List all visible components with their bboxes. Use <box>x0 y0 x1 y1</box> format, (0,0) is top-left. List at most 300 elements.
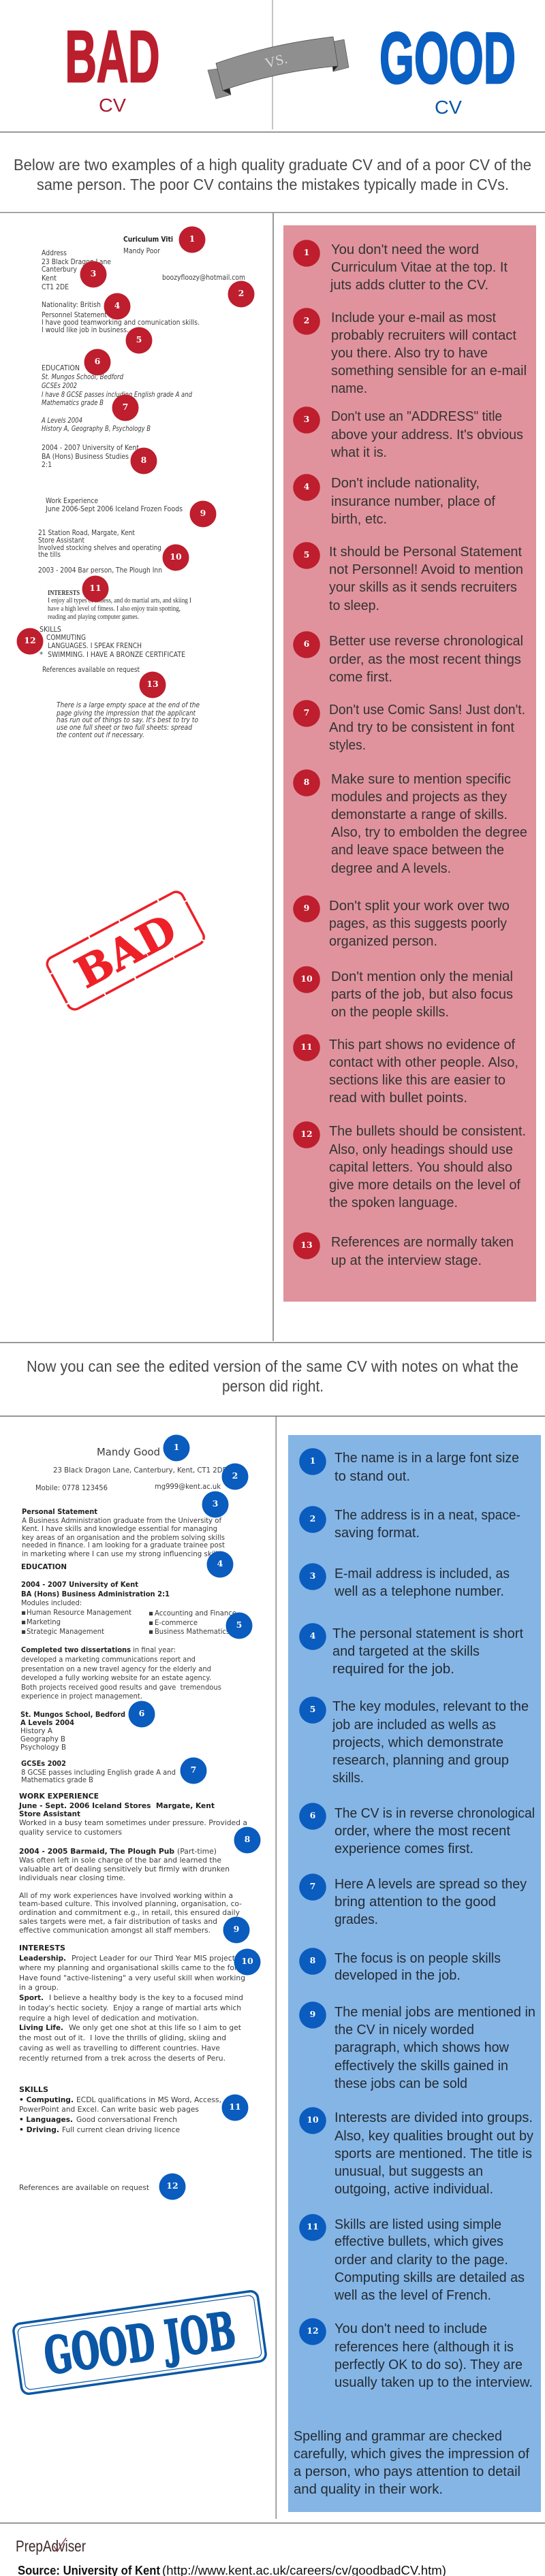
good note 10: 10 <box>307 2114 319 2125</box>
good CV sample: developed a marketing communications report and <box>21 1656 196 1664</box>
intro text <box>14 156 531 193</box>
good note 4: 4 <box>310 1630 316 1641</box>
note 11: sections like this are easier to <box>329 1073 505 1088</box>
note 6: come first. <box>329 670 392 685</box>
good note 10: unusual, but suggests an <box>334 2164 483 2179</box>
good CV sample: quality service to customers <box>19 1829 122 1837</box>
good note 9: The menial jobs are mentioned in <box>334 2005 535 2020</box>
bad CV sample: 2:1 <box>42 461 52 469</box>
bad CV number badges: 6 <box>95 356 101 366</box>
good note 11: well as the level of French. <box>334 2288 491 2303</box>
good CV sample: Human Resource Management <box>27 1609 131 1617</box>
good note 11: 11 <box>307 2221 319 2232</box>
good CV sample: We only get one shot at this life so I aim to get <box>69 2024 241 2032</box>
note 13: References are normally taken <box>331 1235 514 1250</box>
title: GOOD CV: CV <box>435 97 462 118</box>
good CV sample: GCSEs 2002 <box>21 1760 66 1768</box>
bad CV sample: has run out of things to say. It's best to try to <box>57 716 198 724</box>
good CV sample: require a high level of dedication and motivation. <box>19 2014 199 2023</box>
good note 11: effective bullets, which gives <box>334 2234 503 2249</box>
good CV number badges: 5 <box>236 1620 242 1630</box>
note 12: The bullets should be consistent. <box>329 1124 526 1139</box>
good CV sample: sales targets were met, a fair distribution of tasks and <box>19 1918 217 1926</box>
good CV sample: St. Mungos School, Bedford <box>20 1711 125 1719</box>
note 11 <box>293 1034 518 1106</box>
good CV number badges: 1 <box>174 1442 179 1452</box>
note 2: something sensible for an e-mail <box>331 364 527 379</box>
good CV sample: ▪ <box>21 1609 26 1617</box>
bad CV number badges: 7 <box>123 402 128 412</box>
bad CV number badges: 5 <box>136 334 142 344</box>
good CV sample: key areas of an organisation and the problem solving skills <box>22 1534 225 1542</box>
bad CV number badges: 3 <box>91 268 96 278</box>
note 5: It should be Personal Statement <box>329 545 522 560</box>
good note 6: order, where the most recent <box>334 1824 510 1839</box>
good note 6 <box>299 1803 535 1856</box>
bad CV sample: I enjoy all types of fitness, and do martial arts, and skiing I <box>48 597 191 605</box>
bad CV sample: Involved stocking shelves and operating <box>38 544 161 552</box>
good CV sample: • Computing. <box>19 2096 74 2104</box>
good note 10: Also, key qualities brought out by <box>334 2129 533 2144</box>
note 7: 7 <box>304 707 309 718</box>
note 13: 13 <box>300 1240 313 1250</box>
good note 7: 7 <box>310 1881 315 1891</box>
good note 12: references here (although it is <box>334 2340 514 2355</box>
good note 12 <box>299 2318 533 2390</box>
bad CV sample: References available on request <box>42 666 140 674</box>
stamp: GOOD JOB: GOOD JOB <box>41 2302 239 2386</box>
note 9: pages, as this suggests poorly <box>329 916 507 931</box>
good note 1: 1 <box>310 1455 315 1466</box>
note 4: insurance number, place of <box>331 494 495 509</box>
note 6: Better use reverse chronological <box>329 634 523 649</box>
note 12 <box>293 1121 526 1210</box>
good note 9: these jobs can be sold <box>334 2076 467 2091</box>
good note 11 <box>299 2214 525 2303</box>
note 7 <box>293 700 525 753</box>
good CV sample: Strategic Management <box>27 1628 104 1636</box>
note 3: above your address. It's obvious <box>331 428 523 442</box>
good note 5: The key modules, relevant to the <box>332 1699 529 1714</box>
good CV number badges: 3 <box>213 1498 218 1509</box>
good CV sample: caving as well as travelling to different countries. Have <box>19 2044 220 2052</box>
bad CV sample: I would like job in business. <box>42 326 129 334</box>
bad CV sample: I have good teamworking and comunication skills. <box>42 319 200 327</box>
bad CV sample: the content out if necessary. <box>57 731 144 739</box>
bad CV number badges: 9 <box>200 508 206 518</box>
note 5: your skills as it sends recruiters <box>329 580 517 595</box>
good CV sample: INTERESTS <box>19 1944 65 1952</box>
good note 9: 9 <box>310 2009 315 2019</box>
bad CV sample: * <box>40 651 43 659</box>
panel: bad CV notes <box>283 225 536 1302</box>
note 3: Don't use an "ADDRESS" title <box>331 409 502 424</box>
note 2: probably recruiters will contact <box>331 328 516 343</box>
closing note: and quality in their work. <box>294 2482 443 2497</box>
note 10: parts of the job, but also focus <box>331 987 513 1002</box>
note 4: birth, etc. <box>331 512 387 527</box>
good note 9: the CV in nicely worded <box>334 2023 474 2038</box>
good CV sample: Personal Statement <box>22 1508 97 1516</box>
good note 11: Skills are listed using simple <box>334 2217 501 2232</box>
intro text: Below are two examples of a high quality graduate CV and of a poor CV of the <box>14 156 531 174</box>
good CV sample: WORK EXPERIENCE <box>19 1792 99 1801</box>
good note 4 <box>299 1623 523 1677</box>
good CV sample: I believe a healthy body is the key to a focused mind <box>49 1994 243 2002</box>
note 9: organized person. <box>329 934 437 949</box>
bad CV sample <box>38 236 245 739</box>
good CV number badges: 9 <box>234 1924 239 1934</box>
bad CV sample: There is a large empty space at the end of the <box>57 701 200 709</box>
bad CV sample: INTERESTS <box>48 590 80 597</box>
good CV sample: individuals near closing time. <box>19 1874 125 1882</box>
ribbon: VS. <box>208 37 349 99</box>
good CV sample: Good conversational French <box>76 2116 177 2124</box>
note 9: 9 <box>304 903 309 913</box>
title: BAD CV: CV <box>99 95 126 116</box>
good CV sample: Have found "active-listening" a very useful skill when working <box>19 1974 245 1982</box>
good note 12: You don't need to include <box>334 2321 487 2336</box>
bad CV sample: Nationality: British <box>42 301 101 309</box>
good note 8 <box>299 1948 501 1983</box>
good note 10: Interests are divided into groups. <box>334 2110 533 2125</box>
bad CV sample: SKILLS <box>40 626 61 634</box>
good note 5: projects, which demonstrate <box>332 1735 503 1750</box>
good CV number badges: 12 <box>166 2180 178 2191</box>
good note 6: The CV is in reverse chronological <box>334 1806 535 1821</box>
bad CV sample: page giving the impression that the applicant <box>56 709 196 718</box>
stamp: BAD: BAD <box>67 904 185 998</box>
note 11: 11 <box>300 1042 313 1052</box>
good CV sample: Mandy Good <box>97 1446 160 1458</box>
good note 8: 8 <box>310 1955 316 1965</box>
bad CV number badges: 10 <box>170 551 182 562</box>
good note 4: The personal statement is short <box>332 1626 523 1641</box>
good note 4: and targeted at the skills <box>332 1644 480 1659</box>
good note 8: developed in the job. <box>334 1968 461 1983</box>
bad CV sample: 21 Station Road, Margate, Kent <box>38 529 135 537</box>
good CV sample: E-commerce <box>155 1619 198 1627</box>
bad CV sample: CT1 2DE <box>42 283 69 291</box>
good note 8: The focus is on people skills <box>334 1951 501 1966</box>
good note 2 <box>299 1506 520 1541</box>
closing note: Spelling and grammar are checked <box>294 2429 502 2444</box>
bad CV sample: LANGUAGES. I SPEAK FRENCH <box>48 642 142 650</box>
note 7: Don't use Comic Sans! Just don't. <box>329 703 525 718</box>
second intro text <box>27 1357 518 1395</box>
note 10 <box>293 966 513 1020</box>
note 6: 6 <box>304 639 310 649</box>
bad CV sample: have a high level of fitness. I also enjoy train spotting, <box>48 605 181 613</box>
good note 5: skills. <box>332 1771 364 1786</box>
note 6: order, as the most recent things <box>329 652 521 667</box>
note 1: 1 <box>304 247 309 257</box>
good note 7: grades. <box>334 1912 378 1927</box>
good CV number badges: 10 <box>241 1956 253 1966</box>
bad CV sample: SWIMMING. I HAVE A BRONZE CERTIFICATE <box>48 651 185 659</box>
panel: good CV notes <box>288 1435 541 2512</box>
bad CV number badges: 8 <box>141 455 147 465</box>
intro text: same person. The poor CV contains the mistakes typically made in CVs. <box>37 176 509 193</box>
good note 12: perfectly OK to do so). They are <box>334 2357 523 2372</box>
good CV sample: 8 GCSE passes including English grade A and <box>21 1769 176 1777</box>
good CV number badges <box>128 1435 260 2200</box>
good CV sample: Completed two dissertations <box>21 1646 131 1654</box>
good CV sample: team-based culture. This involved planning, organisation, co- <box>19 1900 242 1908</box>
note 3 <box>293 406 523 460</box>
title: BAD CV: BAD <box>65 15 159 97</box>
ribbon: VS.: VS. <box>263 50 289 71</box>
note 11: contact with other people. Also, <box>329 1055 518 1070</box>
note 3: 3 <box>304 414 309 424</box>
note 4: Don't include nationality, <box>331 476 480 491</box>
logo: PrepAdviser: PrepAdviser <box>16 2537 86 2555</box>
note 1: You don't need the word <box>331 242 479 257</box>
good CV sample: ▪ <box>149 1628 153 1636</box>
good CV sample: Both projects received good results and gave tremendous <box>21 1684 221 1692</box>
good note 5: research, planning and group <box>332 1753 509 1768</box>
bad CV sample: History A, Geography B, Psychology B <box>42 425 151 433</box>
note 3: what it is. <box>330 445 387 460</box>
good note 1: to stand out. <box>334 1469 410 1484</box>
note 5: not Personnel! Avoid to mention <box>329 562 523 577</box>
good note 2: The address is in a neat, space- <box>334 1508 520 1523</box>
good CV sample: EDUCATION <box>21 1563 67 1571</box>
title: BAD CV <box>65 15 159 116</box>
good CV sample: ▪ <box>21 1618 26 1626</box>
good CV sample: Worked in a busy team sometimes under pressure. Provided a <box>19 1819 247 1827</box>
note 8: 8 <box>304 777 310 787</box>
note 2: 2 <box>304 315 309 325</box>
good CV sample: recently returned from a trek across the deserts of Peru. <box>19 2055 225 2063</box>
second intro text: person did right. <box>222 1377 324 1395</box>
good CV number badges: 7 <box>191 1765 196 1775</box>
bad CV sample: reading and playing computer games. <box>48 613 139 621</box>
good CV sample: • Driving. <box>19 2126 59 2134</box>
note 8: demonstarte a range of skills. <box>331 807 508 822</box>
good CV number badges: 11 <box>229 2102 241 2112</box>
good CV number badges: 4 <box>217 1558 223 1568</box>
note 2: you there. Also try to have <box>331 346 488 361</box>
good note 12: 12 <box>307 2325 319 2336</box>
note 12: capital letters. You should also <box>329 1160 512 1175</box>
bad CV sample: 23 Black Dragon Lane <box>42 258 111 266</box>
title: GOOD CV <box>379 17 516 118</box>
bad CV sample: COMMUTING <box>46 634 86 642</box>
stamp: BAD <box>44 889 206 1012</box>
note 9 <box>293 895 510 949</box>
good note 6: 6 <box>310 1810 316 1820</box>
note 8: Also, try to embolden the degree <box>331 825 527 840</box>
good CV sample: where my planning and organisational skills came to the fore. <box>19 1964 244 1972</box>
good CV sample: SKILLS <box>19 2086 48 2094</box>
good note 9: paragraph, which shows how <box>334 2040 510 2055</box>
note 1 <box>293 240 508 293</box>
bad CV number badges: 2 <box>238 288 244 298</box>
note 10: on the people skills. <box>331 1005 449 1020</box>
note 12: 12 <box>300 1129 313 1139</box>
note 4 <box>293 474 495 527</box>
good CV sample: ECDL qualifications in MS Word, Access, <box>76 2096 221 2104</box>
bad CV sample: Mathematics grade B <box>42 399 104 407</box>
good note 9: effectively the skills gained in <box>334 2059 508 2074</box>
good CV sample: in a group. <box>19 1984 59 1992</box>
bad CV number badges <box>16 226 255 698</box>
good CV sample: Business Mathematics <box>155 1628 230 1636</box>
good note 10: sports are mentioned. The title is <box>334 2146 532 2161</box>
good CV sample: A Business Administration graduate from the University of <box>22 1517 221 1525</box>
good note 1 <box>299 1448 519 1484</box>
good note 3: E-mail address is included, as <box>334 1566 510 1581</box>
good note 9 <box>299 2001 535 2091</box>
good CV sample: Psychology B <box>20 1743 66 1752</box>
good CV sample: A Levels 2004 <box>20 1719 74 1727</box>
closing note: a person, who pays attention to detail <box>294 2464 520 2479</box>
good CV sample: in today's hectic society. Enjoy a range of martial arts which <box>19 2004 241 2012</box>
good CV sample: Living Life. <box>19 2024 63 2032</box>
good CV sample: Modules included: <box>21 1599 82 1607</box>
bad CV sample: 2004 - 2007 University of Kent <box>42 444 139 452</box>
bad CV number badges: 1 <box>189 234 195 244</box>
bad CV sample: St. Mungos School, Bedford <box>42 373 123 381</box>
bad CV sample: boozyfloozy@hotmail.com <box>162 274 245 282</box>
good CV sample: References are available on request <box>19 2184 149 2192</box>
good CV sample: Kent. I have skills and knowledge essential for managing <box>22 1525 217 1533</box>
good CV sample: valuable art of dealing sensitively but firmly with drunken <box>19 1865 230 1873</box>
good CV sample: in final year: <box>133 1646 176 1654</box>
good note 6: experience comes first. <box>334 1841 473 1856</box>
good CV sample: • Languages. <box>19 2116 73 2124</box>
good note 11: order and clarity to the page. <box>334 2253 508 2268</box>
note 7: styles. <box>329 738 366 753</box>
good CV sample: Marketing <box>27 1618 61 1626</box>
good CV sample: ordination and commitment e.g., in retail, this ensured daily <box>19 1909 240 1917</box>
good note 2: saving format. <box>334 1526 420 1541</box>
note 12: the spoken language. <box>329 1195 458 1210</box>
note 11: This part shows no evidence of <box>329 1037 515 1052</box>
good CV sample <box>18 1446 247 2192</box>
bad CV sample: Work Experience <box>46 497 98 505</box>
bad CV sample: June 2006-Sept 2006 Iceland Frozen Foods <box>45 505 183 513</box>
note 8: degree and A levels. <box>331 861 451 876</box>
good CV sample: effective communication amongst all staff members. <box>19 1927 211 1935</box>
good CV sample: Geography B <box>20 1735 65 1743</box>
source line <box>18 2564 446 2576</box>
bad CV sample: Personnel Statement <box>42 311 107 319</box>
good note 3: well as a telephone number. <box>334 1584 504 1599</box>
note 11: read with bullet points. <box>329 1091 467 1106</box>
good CV sample: needed in finance. I am looking for a graduate trainee post <box>22 1541 225 1549</box>
bad CV sample: use one full sheet or two full sheets: spread <box>57 724 192 732</box>
note 8 <box>293 769 527 876</box>
note 13: up at the interview stage. <box>331 1253 482 1268</box>
note 8: and leave space between the <box>331 843 504 858</box>
bad CV sample: Canterbury <box>42 265 77 274</box>
note 4: 4 <box>304 481 310 492</box>
good CV sample: All of my work experiences have involved working within a <box>19 1892 233 1900</box>
good note 7 <box>299 1873 527 1927</box>
good CV sample: ▪ <box>149 1609 153 1617</box>
note 1: juts adds clutter to the CV. <box>330 278 488 293</box>
good CV sample: experience in project management. <box>21 1692 142 1701</box>
note 5: 5 <box>304 549 309 560</box>
good note 7: bring attention to the good <box>334 1895 496 1910</box>
good note 3 <box>299 1563 510 1599</box>
good CV sample: in marketing where I can use my strong influencing skills. <box>22 1550 223 1558</box>
good CV sample: Mathematics grade B <box>21 1776 93 1784</box>
good note 12: usually taken up to the interview. <box>334 2375 533 2390</box>
good CV sample: presentation on a new travel agency for the elderly and <box>21 1665 211 1673</box>
good CV sample: Accounting and Finance <box>155 1609 236 1617</box>
good note 10 <box>299 2107 533 2197</box>
good CV sample: mg999@kent.ac.uk <box>155 1483 221 1491</box>
good CV sample: ▪ <box>21 1628 26 1636</box>
good note 2: 2 <box>310 1513 315 1524</box>
good CV sample: Leadership. <box>19 1954 66 1963</box>
stamp: GOOD JOB <box>13 2290 266 2395</box>
bad CV sample: Address <box>42 249 67 257</box>
good CV number badges: 6 <box>139 1708 145 1718</box>
good CV sample: Project Leader for our Third Year MIS project <box>72 1954 235 1963</box>
bad CV sample: GCSEs 2002 <box>42 382 77 390</box>
note 12: give more details on the level of <box>329 1178 520 1193</box>
bad CV sample: EDUCATION <box>42 364 80 372</box>
bad CV sample: Store Assistant <box>38 536 84 545</box>
good CV sample: PowerPoint and Excel. Can write basic web pages <box>19 2106 199 2114</box>
bad CV sample: BA (Hons) Business Studies <box>42 453 129 461</box>
closing note <box>294 2429 529 2497</box>
good CV sample: 2004 - 2005 Barmaid, The Plough Pub <box>19 1848 174 1856</box>
note 2: Include your e-mail as most <box>331 310 496 325</box>
note 2: name. <box>331 381 367 396</box>
good CV sample: Full current clean driving licence <box>62 2126 180 2134</box>
closing note: carefully, which gives the impression of <box>294 2447 529 2462</box>
good CV sample: 2004 - 2007 University of Kent <box>21 1581 138 1589</box>
good CV sample: the most out of it. I love the thrills of gliding, skiing and <box>19 2034 226 2042</box>
bad CV sample: A Levels 2004 <box>41 417 82 425</box>
note 2 <box>293 308 527 396</box>
bad CV number badges: 4 <box>114 300 121 310</box>
good CV sample: developed a fully working website for an estate agency. <box>21 1674 211 1682</box>
bad CV number badges: 11 <box>89 583 102 593</box>
good note 5 <box>299 1696 529 1786</box>
good CV sample: History A <box>20 1727 53 1735</box>
bad CV number badges: 12 <box>24 635 36 645</box>
bad CV sample: I have 8 GCSE passes including English grade A and <box>42 391 192 399</box>
note 13 <box>293 1232 514 1268</box>
good CV sample: June - Sept. 2006 Iceland Stores Margate, Kent <box>18 1802 215 1810</box>
note 5 <box>293 542 523 613</box>
bad CV sample: Mandy Poor <box>123 247 161 255</box>
second intro text: Now you can see the edited version of the same CV with notes on what the <box>27 1357 518 1375</box>
good CV number badges: 8 <box>245 1834 251 1844</box>
note 10: 10 <box>300 973 313 984</box>
bad CV sample: the tills <box>38 551 61 559</box>
note 9: Don't split your work over two <box>329 899 510 914</box>
note 5: to sleep. <box>329 598 379 613</box>
good CV sample: BA (Hons) Business Administration 2:1 <box>21 1590 170 1598</box>
bad CV sample: 2003 - 2004 Bar person, The Plough Inn <box>38 566 162 575</box>
note 8: Make sure to mention specific <box>331 772 511 787</box>
bad CV number badges: 13 <box>146 679 159 689</box>
bad CV sample: Kent <box>42 274 57 283</box>
note 8: modules and projects as they <box>331 790 507 805</box>
good note 1: The name is in a large font size <box>334 1451 519 1466</box>
good note 5: 5 <box>310 1704 315 1714</box>
note 6 <box>293 631 523 685</box>
note 10: Don't mention only the menial <box>331 969 513 984</box>
good CV sample: (Part-time) <box>177 1848 217 1856</box>
